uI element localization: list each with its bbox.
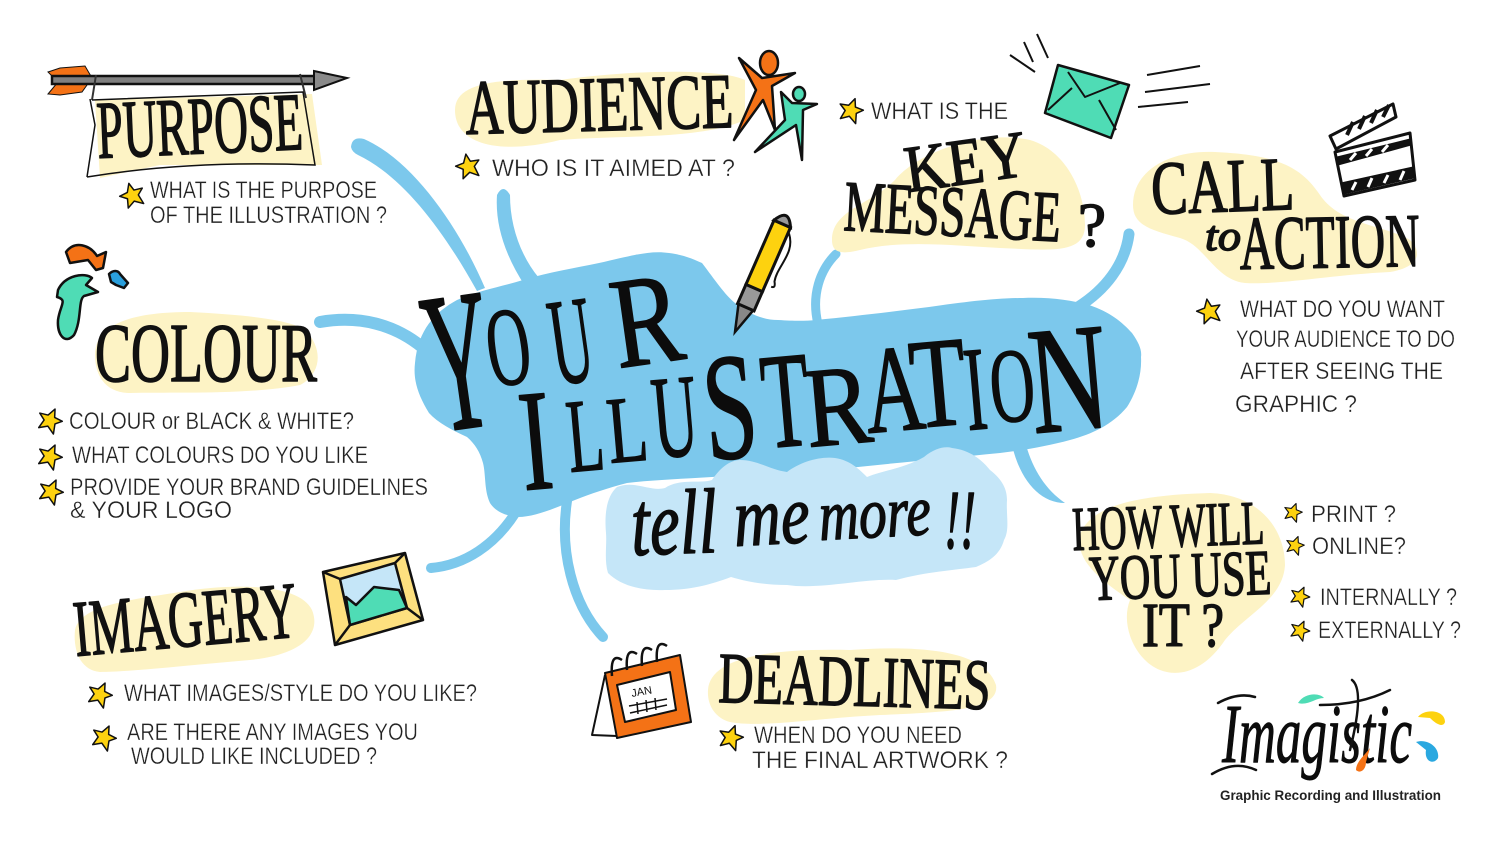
title line: illustration: U — [647, 351, 703, 484]
icon: star — [716, 722, 746, 752]
title line: illustration: I — [959, 322, 992, 456]
icon: clapperboard — [1330, 104, 1415, 196]
title line: illustration: T — [755, 323, 816, 477]
icon: star — [1194, 296, 1224, 326]
heading: purpose: PURPOSE — [95, 76, 305, 176]
title line: illustration: N — [1022, 292, 1115, 466]
heading: call to action — [1150, 142, 1420, 286]
heading: audience: AUDIENCE — [464, 57, 734, 151]
heading: how will you use it: YOU USE — [1088, 537, 1272, 614]
tell me more text: more — [817, 470, 933, 556]
colour questions: PROVIDE YOUR BRAND GUIDELINES — [70, 474, 428, 501]
tell me more text: tell — [629, 470, 719, 575]
deadlines background — [708, 648, 996, 724]
heading: deadlines: DEADLINES — [718, 638, 992, 725]
icon: star — [117, 180, 147, 210]
imagery background — [75, 587, 314, 672]
audience background — [455, 72, 745, 147]
how will questions: PRINT ? — [1311, 501, 1396, 528]
panel: imagery — [70, 553, 477, 770]
cloud: tell me more — [605, 447, 1007, 590]
icon: framed picture — [323, 553, 423, 645]
panel: audience — [453, 51, 817, 182]
colour questions: COLOUR or BLACK & WHITE? — [69, 408, 354, 435]
heading: key message — [842, 118, 1106, 260]
icon: stars — [85, 679, 119, 752]
calendar month: JAN — [630, 685, 653, 700]
heading: key message: ? — [1078, 192, 1106, 260]
logo flourishes — [1212, 680, 1390, 774]
title line: your: U — [541, 270, 601, 412]
central blue blob — [415, 252, 1141, 517]
icon: paint splats — [57, 245, 128, 339]
icon: envelope — [1010, 34, 1210, 138]
tell me more text — [629, 468, 976, 575]
panel: purpose — [48, 66, 387, 229]
how will questions: ONLINE? — [1312, 533, 1406, 560]
imagery questions: WOULD LIKE INCLUDED ? — [131, 743, 377, 770]
call to action question: AFTER SEEING THE — [1240, 358, 1443, 385]
icon: star — [453, 151, 483, 181]
title line: your: R — [602, 245, 692, 396]
heading: call to action: to — [1205, 214, 1241, 260]
panel: colour — [35, 245, 428, 524]
tell me more text: !! — [944, 474, 976, 567]
logo: imagistic — [1212, 680, 1445, 803]
icon: star — [836, 95, 866, 125]
title line: illustration: T — [904, 311, 972, 457]
title line: illustration: S — [696, 322, 764, 493]
key message background — [832, 137, 1085, 252]
purpose question — [150, 177, 387, 229]
heading: how will you use it — [1071, 489, 1272, 660]
colour questions: WHAT COLOURS DO YOU LIKE — [72, 442, 368, 469]
imagery questions: WHAT IMAGES/STYLE DO YOU LIKE? — [124, 680, 477, 707]
tell me more text: me — [731, 468, 812, 565]
call to action question — [1235, 296, 1455, 418]
heading: key message: KEY — [900, 118, 1031, 207]
deadlines question — [752, 722, 1008, 774]
title line: illustration: L — [562, 377, 609, 495]
heading: key message: MESSAGE — [842, 166, 1063, 257]
title line: your — [411, 245, 692, 475]
colour questions: & YOUR LOGO — [70, 497, 232, 524]
audience question: WHO IS IT AIMED AT ? — [492, 155, 735, 182]
icon: people — [734, 51, 817, 160]
title line: illustration: R — [799, 341, 877, 472]
deadlines question: WHEN DO YOU NEED — [754, 722, 962, 749]
icon: stars — [1282, 501, 1312, 642]
title line: illustration: O — [985, 325, 1040, 446]
imagery questions: ARE THERE ANY IMAGES YOU — [127, 719, 418, 746]
purpose background — [95, 94, 322, 178]
call to action background — [1133, 152, 1417, 283]
imagery questions — [124, 680, 477, 770]
how will questions: INTERNALLY ? — [1320, 584, 1457, 611]
icon: arrow with orange feathers — [48, 66, 347, 100]
icon: calendar — [592, 644, 691, 738]
sign frame — [87, 92, 315, 177]
call to action question: GRAPHIC ? — [1235, 391, 1357, 418]
panel: key message — [832, 34, 1210, 260]
heading: colour: COLOUR — [95, 307, 317, 400]
heading: imagery: IMAGERY — [70, 567, 301, 674]
title line: illustration: L — [603, 375, 652, 484]
colour questions — [69, 408, 428, 524]
icon: pencil — [727, 212, 802, 339]
icon: stars — [35, 405, 66, 506]
title line: illustration: I — [513, 360, 558, 522]
branches connecting centre to topics — [320, 138, 1129, 637]
heading: how will you use it: HOW WILL — [1071, 489, 1265, 564]
how will background — [1079, 493, 1285, 673]
title line: your: Y — [411, 247, 506, 475]
logo tagline: Graphic Recording and Illustration — [1220, 788, 1441, 803]
title line: illustration — [513, 292, 1115, 522]
purpose question: WHAT IS THE PURPOSE — [150, 177, 377, 204]
panel: deadlines — [592, 638, 1008, 774]
panel: how will you use it — [1071, 489, 1461, 673]
colour background — [95, 312, 318, 393]
panel: call to action — [1133, 104, 1455, 418]
heading: how will you use it: IT ? — [1142, 592, 1224, 660]
how will questions: EXTERNALLY ? — [1318, 617, 1461, 644]
deadlines question: THE FINAL ARTWORK ? — [752, 747, 1008, 774]
logo colour drops — [1298, 694, 1445, 772]
purpose question: OF THE ILLUSTRATION ? — [150, 202, 387, 229]
key message lead-in: WHAT IS THE — [871, 98, 1008, 125]
heading: call to action: CALL — [1150, 142, 1296, 231]
call to action question: WHAT DO YOU WANT — [1240, 296, 1445, 323]
title line: your: O — [478, 283, 538, 412]
title line: illustration: A — [858, 317, 929, 460]
main title: your illustration — [411, 245, 1115, 522]
how will questions — [1311, 501, 1461, 644]
